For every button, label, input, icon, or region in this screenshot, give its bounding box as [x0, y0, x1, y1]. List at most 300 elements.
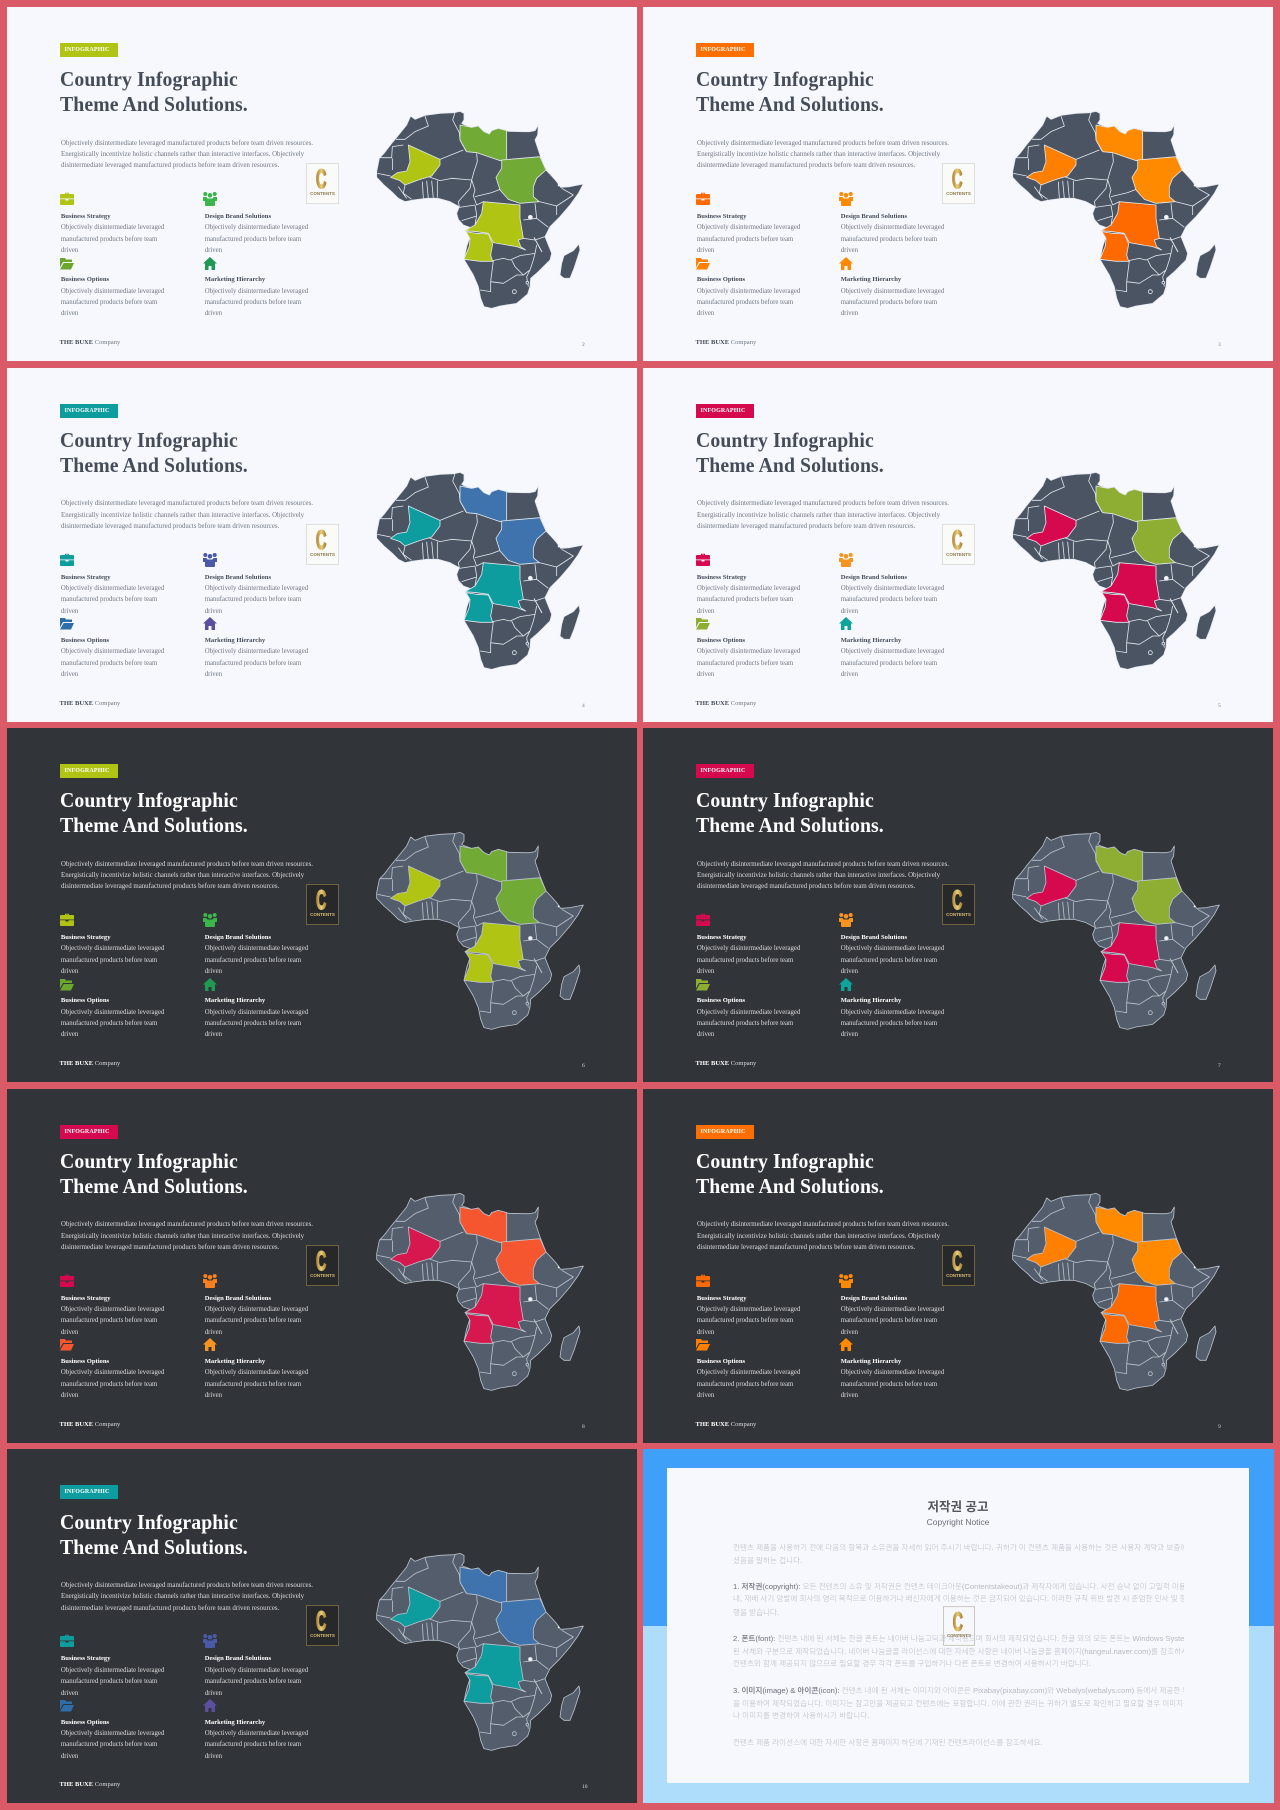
- body text: disintermediate leveraged manufactured products before team driven resources.: [697, 1244, 915, 1251]
- item: Business Options: [60, 618, 164, 678]
- tag: INFOGRAPHIC: [700, 1129, 745, 1135]
- item: Business Options: driven: [697, 1031, 714, 1038]
- item: Marketing Hierarchy: manufactured products before team: [841, 1381, 937, 1388]
- item: Marketing Hierarchy: manufactured products before team: [205, 1020, 301, 1027]
- heading: [696, 1149, 883, 1199]
- item: Marketing Hierarchy: driven: [841, 671, 858, 678]
- item: Marketing Hierarchy: [203, 1699, 323, 1763]
- item: Marketing Hierarchy: Marketing Hierarchy: [205, 276, 265, 283]
- panel: slide 8 dark orange: [643, 1089, 1273, 1443]
- item: Design Brand Solutions: Objectively disintermediate leveraged: [205, 224, 308, 231]
- item: Business Options: manufactured products before team: [61, 660, 157, 667]
- map: Africa: [996, 1172, 1236, 1412]
- logo: CONTENTS: [310, 191, 334, 196]
- footer: THE BUXE Company: [60, 1060, 120, 1067]
- item: Design Brand Solutions: Design Brand Solutions: [205, 574, 271, 581]
- item: Marketing Hierarchy: [839, 617, 944, 678]
- copyright title: 저작권 공고: [928, 1500, 988, 1514]
- item: Business Strategy: manufactured products before team: [697, 236, 793, 243]
- panel: copyright notice background: [643, 1449, 1274, 1803]
- footer: THE BUXE Company: [60, 339, 120, 346]
- copyright subtitle: Copyright Notice: [927, 1517, 989, 1527]
- logo: C: [316, 524, 326, 555]
- panel: slide 4 light crimson: [643, 368, 1273, 722]
- tag: [60, 1485, 118, 1499]
- item: Business Options: Objectively disintermediate leveraged: [697, 1369, 800, 1376]
- panel: slide 7 dark crimson and red-orange: [7, 1089, 637, 1443]
- item: Design Brand Solutions: [203, 553, 308, 615]
- item: Business Options: driven: [61, 1753, 78, 1760]
- item: Design Brand Solutions: driven: [205, 608, 222, 615]
- item: Marketing Hierarchy: Objectively disintermediate leveraged: [205, 1730, 308, 1737]
- item: Business Options: [696, 258, 800, 317]
- item: Business Strategy: [696, 192, 800, 254]
- item: Business Options: driven: [697, 1392, 714, 1399]
- item: Design Brand Solutions: Objectively disintermediate leveraged: [205, 1306, 308, 1313]
- item: Marketing Hierarchy: manufactured products before team: [205, 1741, 301, 1748]
- item: Business Strategy: manufactured products before team: [697, 1317, 793, 1324]
- body text: Energistically incentivize holistic channels rather than interactive interfaces. Objectively: [61, 151, 304, 158]
- item: Marketing Hierarchy: Objectively disintermediate leveraged: [205, 288, 308, 295]
- logo: C: [316, 1605, 326, 1637]
- item: Business Strategy: Objectively disintermediate leveraged: [61, 1306, 164, 1313]
- item: Marketing Hierarchy: driven: [841, 310, 858, 317]
- item: Marketing Hierarchy: Marketing Hierarchy: [205, 637, 265, 644]
- item: Business Options: [696, 618, 800, 678]
- heading: [60, 428, 247, 477]
- logo watermark: CONTENTS: [947, 1633, 971, 1638]
- logo: [306, 884, 338, 925]
- body text: Energistically incentivize holistic channels rather than interactive interfaces. Objectively: [697, 1233, 940, 1240]
- item: Design Brand Solutions: driven: [841, 247, 858, 254]
- item: Design Brand Solutions: driven: [205, 1329, 222, 1336]
- heading: [696, 788, 883, 838]
- item: Design Brand Solutions: Design Brand Solutions: [205, 934, 271, 941]
- body text: Objectively disintermediate leveraged manufactured products before team driven resources.: [61, 1582, 313, 1589]
- body text: Objectively disintermediate leveraged manufactured products before team driven resources.: [61, 500, 313, 507]
- logo: [942, 524, 975, 565]
- page number: 2: [582, 342, 585, 348]
- item: Business Strategy: driven: [61, 247, 78, 254]
- footer: THE BUXE Company: [696, 1421, 756, 1428]
- body text: [697, 500, 949, 530]
- page number: 7: [1218, 1063, 1221, 1069]
- item: Marketing Hierarchy: Marketing Hierarchy: [841, 1358, 901, 1365]
- body text: disintermediate leveraged manufactured products before team driven resources.: [61, 1605, 279, 1612]
- item: Design Brand Solutions: Design Brand Solutions: [841, 1295, 907, 1302]
- item: Business Strategy: Objectively disintermediate leveraged: [61, 224, 164, 231]
- item: Design Brand Solutions: Objectively disintermediate leveraged: [841, 585, 944, 592]
- body text: Energistically incentivize holistic channels rather than interactive interfaces. Objectively: [61, 1233, 304, 1240]
- item: Design Brand Solutions: manufactured products before team: [205, 957, 301, 964]
- body text: Objectively disintermediate leveraged manufactured products before team driven resources.: [697, 500, 949, 507]
- footer: THE BUXE Company: [696, 339, 756, 346]
- logo: C: [952, 163, 962, 194]
- item: Design Brand Solutions: driven: [841, 1329, 858, 1336]
- item: Business Strategy: [60, 1274, 180, 1338]
- body text: [61, 140, 313, 169]
- item: Business Strategy: Objectively disintermediate leveraged: [61, 945, 164, 952]
- page number: 3: [1218, 342, 1221, 348]
- footer: THE BUXE Company: [696, 700, 756, 707]
- item: Business Strategy: Business Strategy: [697, 574, 747, 581]
- logo: [306, 1605, 338, 1646]
- item: Marketing Hierarchy: driven: [205, 1031, 222, 1038]
- item: Business Strategy: [60, 1634, 180, 1698]
- logo: C: [316, 163, 326, 194]
- item: Business Options: Business Options: [697, 276, 745, 283]
- item: Business Strategy: [696, 1274, 816, 1338]
- logo watermark: [943, 1606, 975, 1646]
- logo: [306, 163, 339, 204]
- item: Business Options: manufactured products before team: [697, 299, 793, 306]
- item: Business Options: [60, 1699, 180, 1763]
- tag: [696, 43, 754, 57]
- tag: [60, 764, 118, 778]
- item: Business Options: driven: [697, 310, 714, 317]
- item: Design Brand Solutions: [839, 1274, 959, 1338]
- heading: Country Infographic: [696, 428, 873, 452]
- item: Design Brand Solutions: [203, 192, 308, 254]
- body text: disintermediate leveraged manufactured products before team driven resources.: [61, 162, 279, 169]
- body text: Energistically incentivize holistic channels rather than interactive interfaces. Objectively: [697, 872, 940, 879]
- item: Business Options: [696, 978, 816, 1042]
- tag: INFOGRAPHIC: [700, 768, 745, 774]
- item: Business Options: manufactured products before team: [61, 1381, 157, 1388]
- item: Business Options: Objectively disintermediate leveraged: [61, 1730, 164, 1737]
- item: Design Brand Solutions: Design Brand Solutions: [205, 213, 271, 220]
- item: Business Strategy: Objectively disintermediate leveraged: [697, 1306, 800, 1313]
- body text: [697, 859, 949, 893]
- panel: slide 5 dark lime: [7, 728, 637, 1082]
- body text: Energistically incentivize holistic channels rather than interactive interfaces. Objectively: [61, 512, 304, 519]
- map: Africa: [360, 1532, 600, 1772]
- item: Business Strategy: [60, 914, 164, 975]
- tag: INFOGRAPHIC: [700, 47, 745, 53]
- item: Business Options: [60, 1338, 180, 1402]
- map: Africa: [376, 472, 584, 670]
- item: Business Strategy: manufactured products before team: [697, 957, 793, 964]
- item: Design Brand Solutions: Objectively disintermediate leveraged: [205, 585, 308, 592]
- item: Design Brand Solutions: [203, 1274, 323, 1338]
- tag: [696, 404, 754, 418]
- copyright text: 컨텐츠와 함께 제공되지 않으므로 필요할 경우 각각 폰트를 구입하거나 다른 폰트로 변경하여 사용하시기 바랍니다.: [733, 1659, 1091, 1668]
- heading: [60, 788, 247, 837]
- logo: [306, 524, 339, 565]
- item: Business Options: Business Options: [697, 997, 745, 1004]
- copyright text: 셨음을 말하는 겁니다.: [733, 1556, 802, 1564]
- item: Marketing Hierarchy: Objectively disintermediate leveraged: [841, 288, 944, 295]
- item: Design Brand Solutions: [203, 1634, 323, 1698]
- body text: disintermediate leveraged manufactured products before team driven resources.: [61, 523, 279, 530]
- item: Business Strategy: driven: [697, 968, 714, 975]
- item: Business Strategy: Business Strategy: [61, 934, 111, 941]
- item: Business Options: Objectively disintermediate leveraged: [697, 1009, 800, 1016]
- item: Marketing Hierarchy: driven: [841, 1031, 858, 1038]
- item: Business Strategy: Business Strategy: [697, 1295, 747, 1302]
- item: Marketing Hierarchy: Marketing Hierarchy: [841, 637, 901, 644]
- item: Business Options: driven: [61, 310, 78, 317]
- map: Africa: [996, 811, 1236, 1051]
- item: Marketing Hierarchy: driven: [205, 310, 222, 317]
- heading: Theme And Solutions.: [696, 92, 883, 116]
- logo: CONTENTS: [310, 1273, 334, 1278]
- logo: CONTENTS: [946, 552, 970, 557]
- item: Business Strategy: [696, 913, 816, 977]
- body text: [61, 860, 313, 890]
- panel: slide 3 light teal: [7, 368, 637, 722]
- tag: INFOGRAPHIC: [700, 408, 745, 414]
- item: Design Brand Solutions: [839, 913, 959, 977]
- copyright text: 나 이미지를 변경하여 사용하시기 바랍니다.: [733, 1711, 869, 1720]
- item: Design Brand Solutions: Objectively disintermediate leveraged: [841, 945, 944, 952]
- heading: Theme And Solutions.: [60, 813, 247, 837]
- map: Africa: [360, 1172, 600, 1412]
- logo: [942, 884, 974, 925]
- item: Design Brand Solutions: Objectively disintermediate leveraged: [205, 945, 308, 952]
- tag: [60, 43, 118, 57]
- item: Business Options: driven: [61, 1031, 78, 1038]
- item: Design Brand Solutions: Objectively disintermediate leveraged: [205, 1667, 308, 1674]
- item: Marketing Hierarchy: [203, 617, 308, 678]
- item: Design Brand Solutions: Design Brand Solutions: [205, 1295, 271, 1302]
- item: Business Options: driven: [697, 671, 714, 678]
- item: Business Strategy: Objectively disintermediate leveraged: [697, 224, 800, 231]
- heading: Country Infographic: [60, 1149, 237, 1173]
- item: Business Strategy: manufactured products before team: [61, 596, 157, 603]
- item: Design Brand Solutions: Design Brand Solutions: [205, 1655, 271, 1662]
- item: Business Strategy: [696, 554, 800, 615]
- logo: C: [952, 884, 962, 915]
- item: Design Brand Solutions: driven: [205, 968, 222, 975]
- map: Africa: [1012, 111, 1220, 309]
- item: Business Strategy: driven: [61, 1690, 78, 1697]
- item: Business Options: Business Options: [61, 1719, 109, 1726]
- heading: Theme And Solutions.: [60, 1174, 247, 1198]
- body text: Energistically incentivize holistic channels rather than interactive interfaces. Objectively: [61, 1593, 304, 1600]
- item: Business Options: manufactured products before team: [61, 299, 157, 306]
- logo: CONTENTS: [310, 912, 334, 917]
- item: Design Brand Solutions: manufactured products before team: [841, 1317, 937, 1324]
- item: Business Options: driven: [61, 1392, 78, 1399]
- logo: C: [952, 1245, 962, 1276]
- item: Marketing Hierarchy: Objectively disintermediate leveraged: [841, 1009, 944, 1016]
- item: Business Strategy: Business Strategy: [61, 574, 111, 581]
- item: Marketing Hierarchy: [839, 257, 944, 317]
- item: Design Brand Solutions: driven: [205, 1690, 222, 1697]
- body text: Energistically incentivize holistic channels rather than interactive interfaces. Objectively: [697, 512, 940, 519]
- item: Marketing Hierarchy: manufactured products before team: [841, 660, 937, 667]
- heading: Country Infographic: [696, 1149, 873, 1173]
- logo: CONTENTS: [310, 1633, 334, 1638]
- body text: disintermediate leveraged manufactured products before team driven resources.: [697, 162, 915, 169]
- heading: Theme And Solutions.: [696, 453, 883, 477]
- item: Business Options: [696, 1338, 816, 1402]
- item: Marketing Hierarchy: Marketing Hierarchy: [841, 997, 901, 1004]
- item: Business Options: manufactured products before team: [61, 1020, 157, 1027]
- item: Design Brand Solutions: [203, 913, 308, 975]
- item: Marketing Hierarchy: manufactured products before team: [205, 299, 301, 306]
- item: Business Strategy: manufactured products before team: [697, 596, 793, 603]
- logo: C: [316, 1245, 326, 1276]
- item: Business Options: Business Options: [61, 276, 109, 283]
- item: Marketing Hierarchy: [203, 978, 323, 1042]
- item: Business Options: Objectively disintermediate leveraged: [61, 288, 164, 295]
- item: Business Strategy: Objectively disintermediate leveraged: [61, 1667, 164, 1674]
- item: Business Options: Business Options: [697, 637, 745, 644]
- item: Marketing Hierarchy: driven: [205, 671, 222, 678]
- item: Marketing Hierarchy: Marketing Hierarchy: [205, 1719, 265, 1726]
- tag: [60, 404, 118, 418]
- heading: Country Infographic: [696, 67, 873, 91]
- item: Marketing Hierarchy: driven: [205, 1392, 222, 1399]
- item: Marketing Hierarchy: Objectively disintermediate leveraged: [205, 1009, 308, 1016]
- heading: Theme And Solutions.: [60, 453, 247, 477]
- item: Business Strategy: manufactured products before team: [61, 236, 157, 243]
- item: Design Brand Solutions: manufactured products before team: [205, 596, 301, 603]
- item: Business Strategy: Objectively disintermediate leveraged: [61, 585, 164, 592]
- logo: CONTENTS: [310, 552, 334, 557]
- item: Business Options: Objectively disintermediate leveraged: [61, 648, 164, 655]
- item: Design Brand Solutions: Objectively disintermediate leveraged: [841, 224, 944, 231]
- item: Marketing Hierarchy: Objectively disintermediate leveraged: [205, 1369, 308, 1376]
- page number: 9: [1218, 1424, 1221, 1430]
- item: Design Brand Solutions: Design Brand Solutions: [841, 934, 907, 941]
- heading: Theme And Solutions.: [60, 1535, 247, 1559]
- item: Business Strategy: manufactured products before team: [61, 957, 157, 964]
- item: Business Strategy: Business Strategy: [697, 934, 747, 941]
- item: Marketing Hierarchy: [839, 1338, 959, 1402]
- item: Business Options: Objectively disintermediate leveraged: [61, 1009, 164, 1016]
- item: Business Options: Business Options: [61, 637, 109, 644]
- item: Business Strategy: driven: [697, 1329, 714, 1336]
- tag: [696, 1125, 754, 1139]
- item: Design Brand Solutions: [839, 553, 944, 615]
- page number: 5: [1218, 703, 1221, 709]
- item: Business Options: Objectively disintermediate leveraged: [61, 1369, 164, 1376]
- heading: Country Infographic: [696, 788, 873, 812]
- item: Business Options: manufactured products before team: [697, 1020, 793, 1027]
- item: Business Options: Business Options: [697, 1358, 745, 1365]
- body text: [61, 1580, 313, 1614]
- tag: INFOGRAPHIC: [64, 47, 109, 53]
- item: Business Strategy: [60, 554, 164, 615]
- panel: slide 2 light orange: [643, 7, 1273, 361]
- item: Business Strategy: manufactured products before team: [61, 1678, 157, 1685]
- body text: disintermediate leveraged manufactured products before team driven resources.: [61, 1244, 279, 1251]
- item: Design Brand Solutions: Objectively disintermediate leveraged: [841, 1306, 944, 1313]
- item: Business Options: Objectively disintermediate leveraged: [697, 288, 800, 295]
- item: Marketing Hierarchy: driven: [205, 1753, 222, 1760]
- heading: Country Infographic: [60, 788, 237, 812]
- body text: disintermediate leveraged manufactured products before team driven resources.: [697, 883, 915, 890]
- item: Marketing Hierarchy: Marketing Hierarchy: [205, 1358, 265, 1365]
- body text: disintermediate leveraged manufactured products before team driven resources.: [61, 883, 279, 890]
- item: Business Strategy: driven: [61, 608, 78, 615]
- page number: 10: [582, 1784, 588, 1790]
- item: Business Options: Business Options: [61, 997, 109, 1004]
- item: Business Strategy: Business Strategy: [697, 213, 747, 220]
- item: Business Strategy: Objectively disintermediate leveraged: [697, 585, 800, 592]
- page number: 6: [582, 1063, 585, 1069]
- item: Design Brand Solutions: manufactured products before team: [205, 236, 301, 243]
- item: Business Strategy: Objectively disintermediate leveraged: [697, 945, 800, 952]
- heading: [696, 67, 883, 116]
- body text: Objectively disintermediate leveraged manufactured products before team driven resources.: [61, 1221, 313, 1228]
- logo: CONTENTS: [946, 191, 970, 196]
- body text: disintermediate leveraged manufactured products before team driven resources.: [697, 523, 915, 530]
- logo: C: [952, 524, 962, 555]
- body text: [697, 1219, 949, 1253]
- heading: [60, 67, 247, 116]
- item: Design Brand Solutions: driven: [841, 968, 858, 975]
- page number: 8: [582, 1424, 585, 1430]
- page number: 4: [582, 703, 585, 709]
- item: Marketing Hierarchy: manufactured products before team: [205, 1381, 301, 1388]
- logo: CONTENTS: [946, 912, 970, 917]
- item: Business Options: manufactured products before team: [697, 660, 793, 667]
- tag: INFOGRAPHIC: [64, 408, 109, 414]
- item: Business Strategy: driven: [61, 1329, 78, 1336]
- item: Business Options: Business Options: [61, 1358, 109, 1365]
- heading: Country Infographic: [60, 67, 237, 91]
- item: Design Brand Solutions: manufactured products before team: [841, 596, 937, 603]
- item: Business Options: manufactured products before team: [697, 1381, 793, 1388]
- heading: Country Infographic: [60, 428, 237, 452]
- heading: [60, 1149, 247, 1199]
- body text: Objectively disintermediate leveraged manufactured products before team driven resources.: [61, 140, 313, 147]
- item: Design Brand Solutions: driven: [205, 247, 222, 254]
- heading: [60, 1510, 247, 1560]
- item: Design Brand Solutions: [839, 192, 944, 254]
- heading: [696, 428, 883, 477]
- logo watermark: C: [953, 1608, 963, 1637]
- body text: Objectively disintermediate leveraged manufactured products before team driven resources.: [697, 861, 949, 868]
- heading: Theme And Solutions.: [696, 1174, 883, 1198]
- body text: Energistically incentivize holistic channels rather than interactive interfaces. Objectively: [61, 872, 304, 879]
- body text: Objectively disintermediate leveraged manufactured products before team driven resources.: [61, 861, 313, 868]
- item: Marketing Hierarchy: [203, 257, 308, 317]
- logo: [306, 1245, 338, 1286]
- item: Design Brand Solutions: Design Brand Solutions: [841, 574, 907, 581]
- footer: THE BUXE Company: [60, 1781, 120, 1788]
- map: Africa: [1012, 472, 1220, 670]
- item: Design Brand Solutions: manufactured products before team: [205, 1317, 301, 1324]
- copyright text: 컨텐츠 제품 라이선스에 대한 자세한 사항은 홈페이지 하단에 기재된 컨텐츠라이선스를 참조하세요.: [733, 1738, 1043, 1746]
- item: Marketing Hierarchy: driven: [841, 1392, 858, 1399]
- item: Marketing Hierarchy: Objectively disintermediate leveraged: [841, 1369, 944, 1376]
- item: Marketing Hierarchy: Marketing Hierarchy: [205, 997, 265, 1004]
- logo: CONTENTS: [946, 1273, 970, 1278]
- panel: slide 6 dark crimson: [643, 728, 1273, 1082]
- heading: Theme And Solutions.: [60, 92, 247, 116]
- item: Design Brand Solutions: manufactured products before team: [841, 957, 937, 964]
- item: Design Brand Solutions: driven: [841, 608, 858, 615]
- tag: INFOGRAPHIC: [64, 768, 109, 774]
- item: Business Options: driven: [61, 671, 78, 678]
- item: Business Strategy: driven: [61, 968, 78, 975]
- panel: slide 9 dark teal: [7, 1449, 637, 1803]
- item: Business Strategy: driven: [697, 608, 714, 615]
- item: Business Options: manufactured products before team: [61, 1741, 157, 1748]
- body text: [697, 140, 949, 169]
- item: Marketing Hierarchy: Objectively disintermediate leveraged: [205, 648, 308, 655]
- body text: [61, 500, 313, 530]
- body text: Objectively disintermediate leveraged manufactured products before team driven resources.: [697, 1221, 949, 1228]
- item: Business Options: Objectively disintermediate leveraged: [697, 648, 800, 655]
- logo: [942, 1245, 974, 1286]
- item: Business Strategy: Business Strategy: [61, 1655, 111, 1662]
